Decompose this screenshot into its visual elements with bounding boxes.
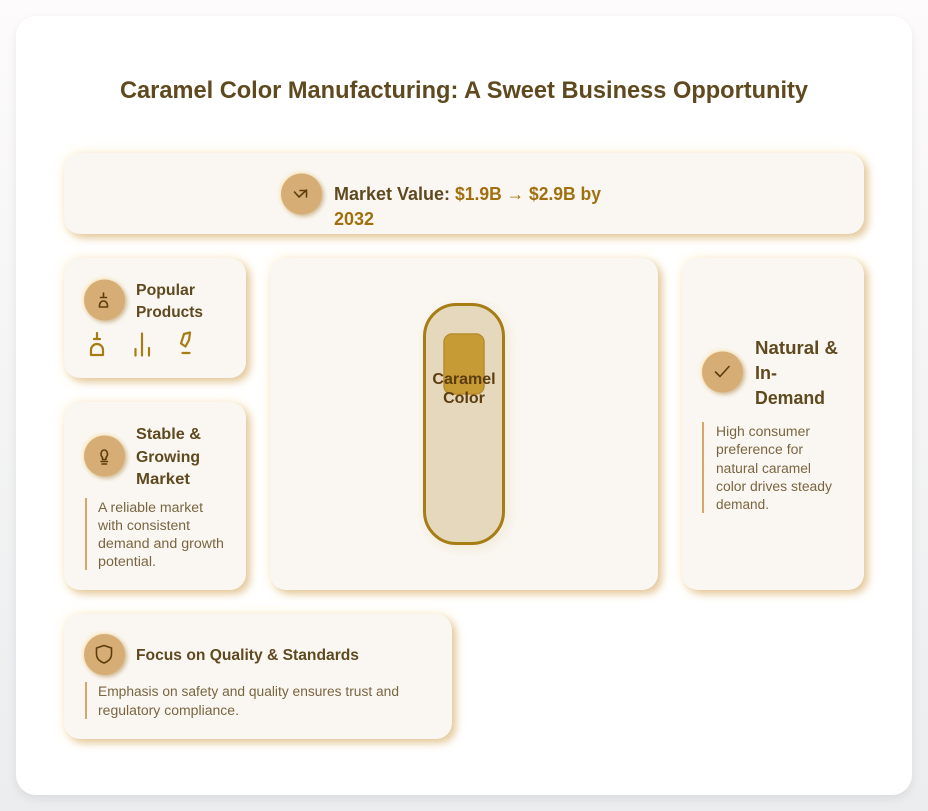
panel: center caramel color vial	[270, 258, 658, 590]
market value text: 2032	[334, 209, 374, 229]
description: stable market: with consistent	[97, 518, 190, 533]
icon: trending arrow	[281, 174, 322, 214]
panel: focus on quality and standards	[64, 614, 452, 739]
caramel liquid	[444, 334, 484, 394]
panel: market value	[64, 153, 864, 234]
vial label	[432, 371, 496, 407]
description: quality: regulatory compliance.	[98, 703, 239, 718]
description: natural demand	[702, 422, 832, 513]
panel: stable and growing market	[64, 402, 246, 590]
icon: shield	[84, 634, 125, 675]
heading: stable and growing market: Market	[136, 471, 191, 488]
description: quality: Emphasis on safety and quality ensures trust and	[98, 684, 399, 699]
description: natural demand: preference for	[716, 442, 804, 457]
heading: natural and in-demand	[755, 338, 838, 408]
heading: focus on quality: Focus on Quality & Standards	[136, 647, 359, 664]
heading: natural and in-demand: Natural &	[755, 338, 838, 358]
vial illustration	[424, 304, 504, 544]
heading: popular products: Popular	[136, 282, 195, 299]
vial label: Color	[443, 390, 485, 407]
icon: light bulb	[84, 436, 125, 476]
market value text: Market Value:	[334, 184, 450, 204]
description: natural demand: natural caramel	[716, 461, 811, 476]
heading: natural and in-demand: Demand	[755, 388, 825, 408]
heading: popular products	[136, 282, 203, 321]
description: natural demand: High consumer	[716, 424, 811, 439]
description: stable market: A reliable market	[98, 500, 203, 515]
description: natural demand: color drives steady	[716, 479, 832, 494]
heading: stable and growing market: Stable &	[136, 426, 201, 443]
panel: natural and in-demand	[682, 258, 864, 590]
icon: product bottle badge	[84, 280, 125, 320]
icon: product bottle	[91, 333, 103, 355]
heading: popular products: Products	[136, 304, 203, 321]
panel: popular products	[64, 258, 246, 378]
icon: sauce pouch	[181, 332, 190, 353]
description: stable market: demand and growth	[98, 536, 224, 551]
icon: bar product	[136, 334, 149, 356]
heading: stable and growing market	[136, 426, 201, 488]
heading: stable and growing market: Growing	[136, 449, 200, 466]
title: Caramel Color Manufacturing: A Sweet Business Opportunity	[120, 77, 809, 104]
description: quality	[85, 682, 399, 719]
icon: check mark	[702, 352, 743, 392]
vial label: Caramel	[432, 371, 496, 388]
heading: natural and in-demand: In-	[755, 363, 777, 383]
description: stable market	[85, 498, 224, 570]
description: stable market: potential.	[98, 554, 156, 569]
description: natural demand: demand.	[716, 497, 769, 512]
market value text	[334, 184, 601, 229]
market value text: $1.9B → $2.9B by	[455, 184, 601, 204]
